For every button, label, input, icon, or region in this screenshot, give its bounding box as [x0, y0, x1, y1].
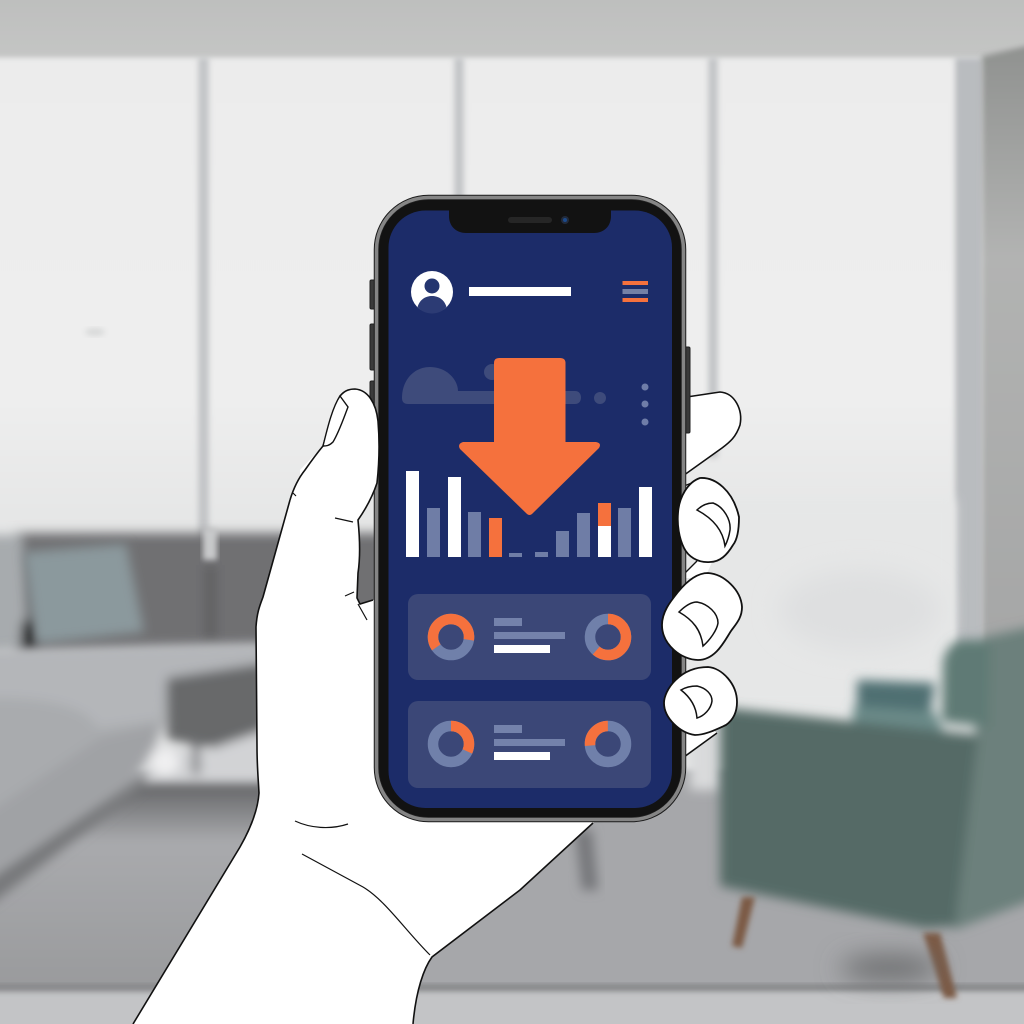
- panel: lower stats: [408, 701, 651, 788]
- title bar: [469, 287, 571, 296]
- fingertip: middle: [662, 573, 742, 660]
- finger webbing behind the phone: [680, 478, 717, 758]
- bar chart: [406, 471, 652, 557]
- donut: upper right: [590, 619, 626, 655]
- text lines: [494, 618, 565, 653]
- wrist creases: [295, 821, 348, 828]
- thumb creases: [293, 493, 367, 620]
- donut: lower right: [588, 724, 628, 764]
- avatar icon: [411, 271, 453, 314]
- notch: [449, 209, 611, 233]
- fingertip: lower: [664, 667, 737, 735]
- text lines: [494, 725, 565, 760]
- hand: palm behind the phone: [133, 446, 600, 1024]
- hamburger menu icon: [622, 281, 648, 302]
- right wall: [982, 40, 1024, 660]
- faint cloud shape: [402, 364, 606, 404]
- side buttons: [370, 280, 690, 433]
- sofa: [0, 528, 385, 905]
- donut: upper left: [426, 612, 476, 662]
- ceiling: [0, 0, 1024, 58]
- distant haze: [700, 500, 955, 710]
- floor: [0, 690, 1024, 1024]
- phone: [370, 196, 690, 822]
- thumbnail: [323, 396, 348, 446]
- panel: upper stats: [408, 594, 651, 680]
- vertical dots: [642, 384, 648, 426]
- window panes: [0, 58, 983, 658]
- screen: [388, 210, 672, 808]
- pillow: [24, 544, 144, 644]
- armchair: [720, 622, 1024, 998]
- phone body: [374, 196, 686, 822]
- donut: lower left: [433, 726, 469, 762]
- down arrow: [459, 358, 600, 515]
- index finger behind the phone: [680, 392, 741, 478]
- fingertip: upper: [678, 478, 739, 562]
- thumb: [290, 389, 379, 640]
